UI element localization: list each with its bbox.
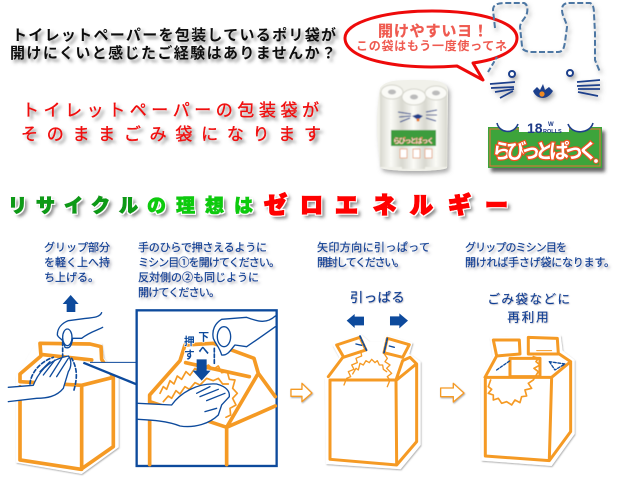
step 2 instruction: ミシン目①を開けてください。 bbox=[138, 256, 280, 269]
step 2 instruction: 開けてください。 bbox=[138, 286, 220, 299]
icon: right arrow bbox=[390, 313, 408, 328]
headline: recycling ideal: ゼロエネルギー bbox=[264, 192, 508, 218]
icon: down arrow bbox=[193, 359, 211, 381]
icon: rabbit whiskers bbox=[490, 80, 600, 98]
label: pull: 引っぱる bbox=[350, 290, 405, 305]
product label: green pack logo: W bbox=[548, 122, 554, 128]
illustration: opened bag bbox=[325, 334, 421, 469]
step 1 instruction bbox=[44, 240, 110, 284]
icon: rabbit face bag bbox=[488, 3, 600, 98]
speech bubble bbox=[345, 11, 517, 80]
icon: hand pressing bbox=[138, 384, 229, 427]
step 4 instruction bbox=[465, 240, 615, 269]
group: left illustrations bbox=[8, 295, 312, 474]
arrow: step 3 to 4 bbox=[441, 383, 464, 402]
step 3 instruction bbox=[317, 240, 430, 269]
group: right illustrations bbox=[325, 290, 575, 469]
label: press down: へ bbox=[198, 345, 209, 357]
label: press down: 押 bbox=[184, 335, 195, 348]
speech bubble: この袋はもう一度使ってネ bbox=[356, 38, 507, 53]
heading: question bbox=[10, 26, 336, 62]
step 1 instruction: を軽く上へ持 bbox=[44, 255, 110, 269]
headline: recycling ideal: の理想は bbox=[147, 195, 253, 217]
illustration: handle bag bbox=[481, 334, 575, 466]
icon: toilet paper pack: らびっとぱっく bbox=[393, 136, 434, 145]
heading: question: 開けにくいと感じたご経験はありませんか？ bbox=[10, 44, 336, 62]
heading: red message: トイレットペーパーの包装袋が bbox=[22, 101, 319, 120]
product label: green pack logo bbox=[488, 120, 602, 168]
step 1 instruction: ち上げる。 bbox=[44, 271, 99, 284]
icon: hand pressing bag bbox=[8, 356, 71, 402]
label: reuse as garbage bag bbox=[487, 291, 570, 324]
icon: rabbit eyes bbox=[509, 70, 573, 77]
icon: hand on tab bbox=[213, 316, 275, 355]
step 1 instruction: グリップ部分 bbox=[44, 240, 110, 254]
icon: toilet paper pack bbox=[377, 80, 448, 171]
product label: green pack logo: らびっとぱっく bbox=[492, 140, 598, 163]
label: press down: す bbox=[184, 349, 195, 361]
step 2 instruction: 手のひらで押さえるように bbox=[138, 240, 267, 254]
icon: hand lifting grip bbox=[57, 313, 103, 348]
headline: recycling ideal: リサイクル bbox=[8, 195, 138, 217]
illustration: bag with hands bbox=[8, 295, 119, 474]
label: reuse as garbage bag: 再利用 bbox=[507, 310, 549, 324]
inset callout wedge bbox=[83, 362, 137, 385]
heading: question: トイレットペーパーを包装しているポリ袋が bbox=[12, 26, 336, 44]
heading: red message: そのままごみ袋になります bbox=[21, 125, 321, 144]
headline: recycling ideal bbox=[8, 192, 508, 218]
icon: up arrow bbox=[63, 295, 79, 312]
speech bubble: 開けやすいヨ！ bbox=[378, 23, 488, 40]
icon: rabbit nose bbox=[533, 84, 553, 98]
heading: red message bbox=[21, 101, 321, 144]
step 2 instruction: 反対側の②も同じように bbox=[138, 271, 259, 284]
label: reuse as garbage bag: ごみ袋などに bbox=[487, 291, 570, 306]
step 4 instruction: 開ければ手さげ袋になります。 bbox=[465, 255, 615, 269]
step 4 instruction: グリップのミシン目を bbox=[465, 240, 567, 254]
step 3 instruction: 開封してください。 bbox=[317, 255, 405, 269]
product label: green pack logo: 18 bbox=[527, 120, 543, 136]
label: press down: 下 bbox=[198, 332, 209, 344]
arrow: step 2 to 3 bbox=[291, 383, 312, 402]
label: press down bbox=[184, 332, 209, 361]
icon: left arrow bbox=[347, 314, 364, 328]
product label: green pack logo: ROLLS bbox=[543, 129, 562, 135]
panel: detail inset bbox=[137, 310, 277, 466]
step 3 instruction: 矢印方向に引っぱって bbox=[317, 240, 430, 254]
step 2 instruction bbox=[138, 240, 280, 299]
